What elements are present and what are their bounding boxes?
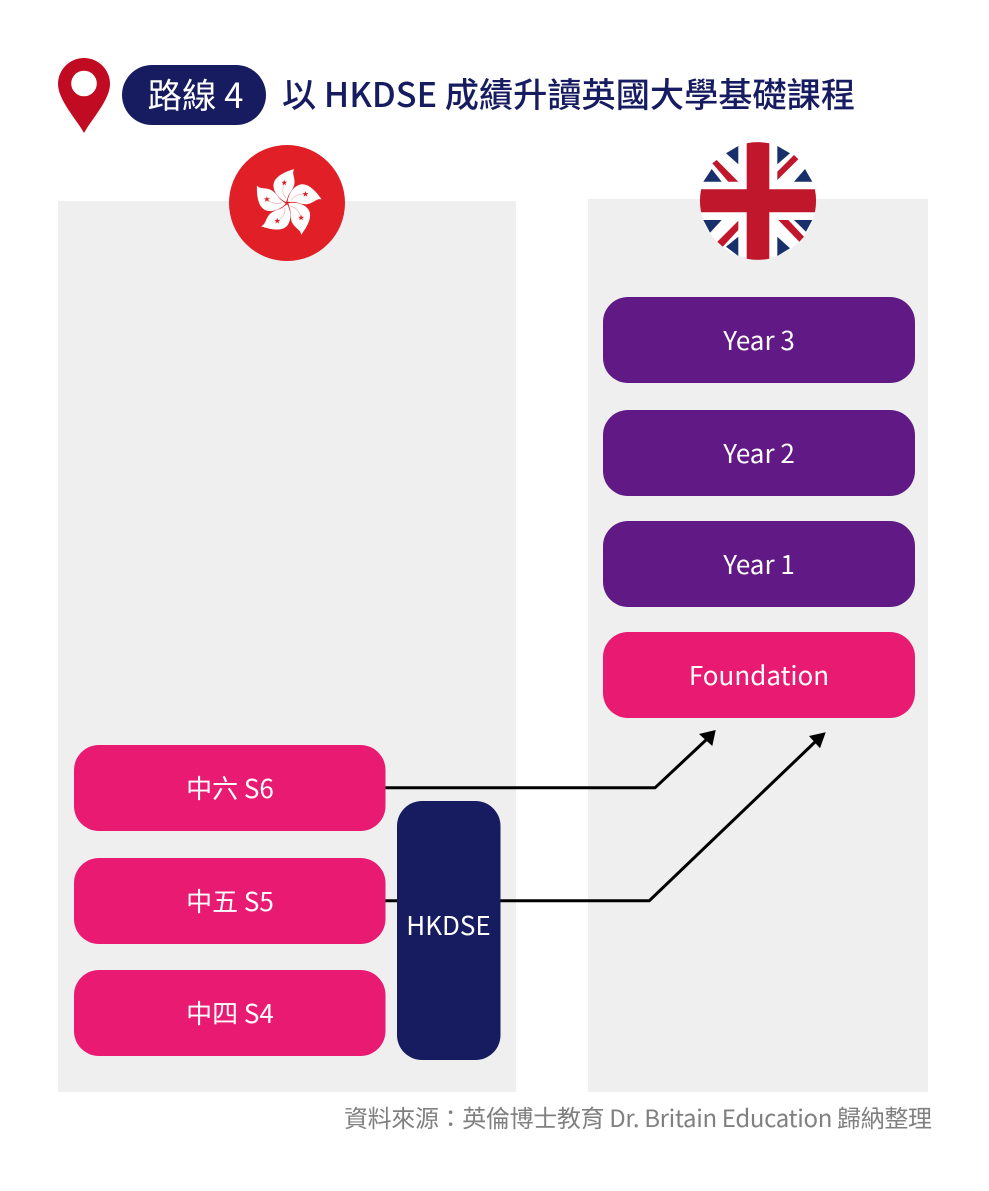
title: 以 HKDSE 成績升讀英國大學基礎課程 <box>282 67 855 117</box>
box: S4: 中四 S4 <box>186 994 274 1031</box>
box: Year 2 <box>603 410 915 496</box>
box: Foundation: Foundation <box>689 656 829 693</box>
route badge: 路線 4 <box>148 68 243 118</box>
box: S4 <box>74 970 386 1056</box>
box: S6: 中六 S6 <box>186 769 274 806</box>
box: Year 1: Year 1 <box>722 545 795 582</box>
box: Year 3 <box>603 297 915 383</box>
box: Year 2: Year 2 <box>722 434 795 471</box>
icon: location pin <box>58 58 110 133</box>
source note: 資料來源：英倫博士教育 Dr. Britain Education 歸納整理 <box>344 1099 932 1134</box>
box: S5 <box>74 858 386 944</box>
box: Year 1 <box>603 521 915 607</box>
box: S6 <box>74 745 386 831</box>
box: HKDSE: HKDSE <box>406 906 491 943</box>
panel: Hong Kong <box>58 201 516 1092</box>
panel: United Kingdom <box>588 199 928 1092</box>
icon: Hong Kong flag <box>229 145 345 261</box>
arrow: S5 to Foundation <box>385 732 826 901</box>
icon: UK flag <box>700 142 816 260</box>
box: S5: 中五 S5 <box>186 882 274 919</box>
box: Year 3: Year 3 <box>722 321 795 358</box>
box: HKDSE <box>397 801 500 1060</box>
box: Foundation <box>603 632 915 718</box>
arrow: S6 to Foundation <box>385 730 716 788</box>
route badge <box>122 65 266 125</box>
